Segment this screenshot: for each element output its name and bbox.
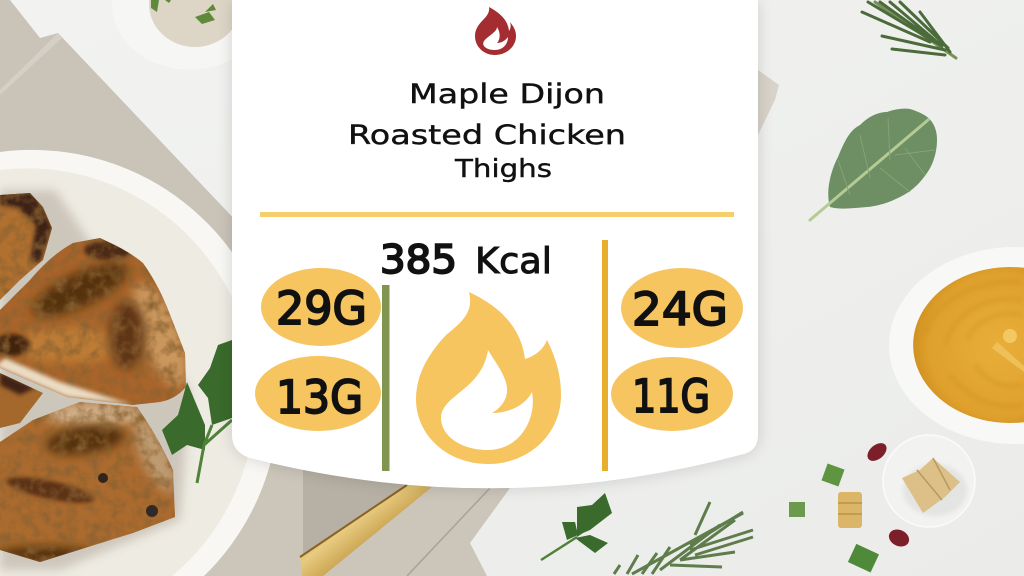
calories — [380, 238, 552, 283]
panel: nutrition card — [232, 0, 758, 488]
calories: 385 — [380, 238, 457, 283]
macro: 29G — [261, 268, 381, 346]
icon: large yellow flame — [416, 292, 561, 464]
macro: 13G: 13G — [276, 371, 363, 424]
divider line — [260, 212, 734, 217]
macro: 11G: 11G — [632, 370, 710, 423]
macro: 29G: 29G — [276, 282, 367, 335]
scattered ingredients — [789, 440, 912, 573]
icon: red flame logo — [475, 7, 516, 55]
title: Roasted Chicken — [348, 120, 626, 151]
orange vertical bar — [602, 240, 608, 471]
rosemary bottom — [614, 502, 753, 574]
calories: Kcal — [475, 241, 552, 282]
parsley sprig — [541, 493, 612, 560]
gold utensil handle — [300, 485, 432, 576]
linen napkin — [0, 0, 779, 576]
title: Thighs — [454, 154, 552, 183]
macro: 11G — [611, 357, 733, 431]
title — [348, 79, 626, 183]
macro: 24G: 24G — [632, 283, 728, 336]
roasted chicken thighs — [0, 190, 199, 570]
title: Maple Dijon — [409, 79, 605, 110]
plate — [0, 150, 279, 576]
green vertical bar — [382, 285, 390, 471]
basil leaf — [810, 109, 937, 220]
small dip bowl — [112, 0, 268, 70]
small bowl with tofu — [883, 435, 975, 527]
macro: 24G — [621, 268, 743, 348]
macro: 13G — [255, 356, 381, 431]
mustard bowl — [889, 247, 1024, 444]
parsley garnish on plate — [162, 340, 232, 483]
rosemary top right — [862, 2, 956, 58]
